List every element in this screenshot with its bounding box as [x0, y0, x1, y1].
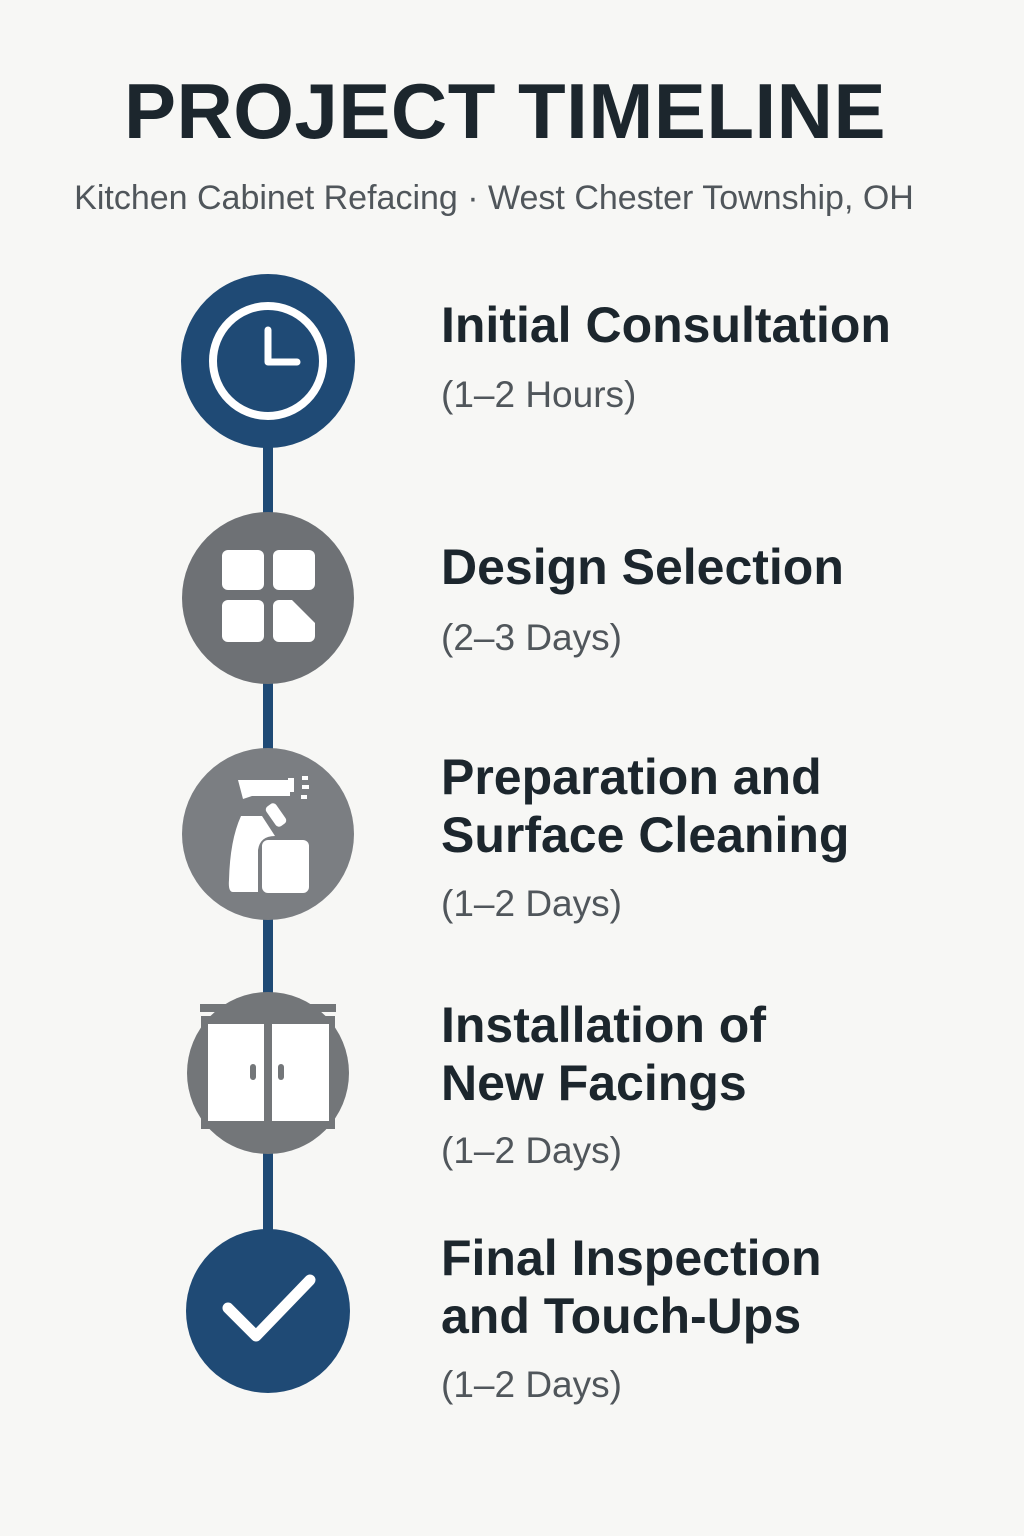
step 1 text: (1–2 Hours)	[441, 374, 636, 415]
step 2 text: (2–3 Days)	[441, 617, 622, 658]
icon: spray bottle	[182, 748, 354, 920]
timeline connector line	[263, 420, 273, 1250]
icon: clock	[181, 274, 355, 448]
title: PROJECT TIMELINE	[124, 67, 886, 155]
step 4 text: New Facings	[441, 1055, 747, 1111]
step 1 text: Initial Consultation	[441, 297, 891, 353]
step 2 text: Design Selection	[441, 539, 844, 595]
step 4 text: Installation of	[441, 997, 766, 1053]
subtitle: Kitchen Cabinet Refacing · West Chester Township, OH	[74, 179, 914, 217]
step 3 text: (1–2 Days)	[441, 883, 622, 924]
step 5 text	[441, 1230, 822, 1405]
step 3 text: Preparation and	[441, 749, 822, 805]
step 5 text: and Touch-Ups	[441, 1288, 801, 1344]
step 4 text: (1–2 Days)	[441, 1130, 622, 1171]
step 5 text: (1–2 Days)	[441, 1364, 622, 1405]
icon: cabinet	[187, 992, 349, 1154]
step 1 text	[441, 297, 891, 415]
step 4 text	[441, 997, 766, 1171]
icon: design grid	[182, 512, 354, 684]
step 2 text	[441, 539, 844, 658]
step 5 text: Final Inspection	[441, 1230, 822, 1286]
icon: checkmark	[186, 1229, 350, 1393]
step 3 text: Surface Cleaning	[441, 807, 849, 863]
step 3 text	[441, 749, 849, 924]
